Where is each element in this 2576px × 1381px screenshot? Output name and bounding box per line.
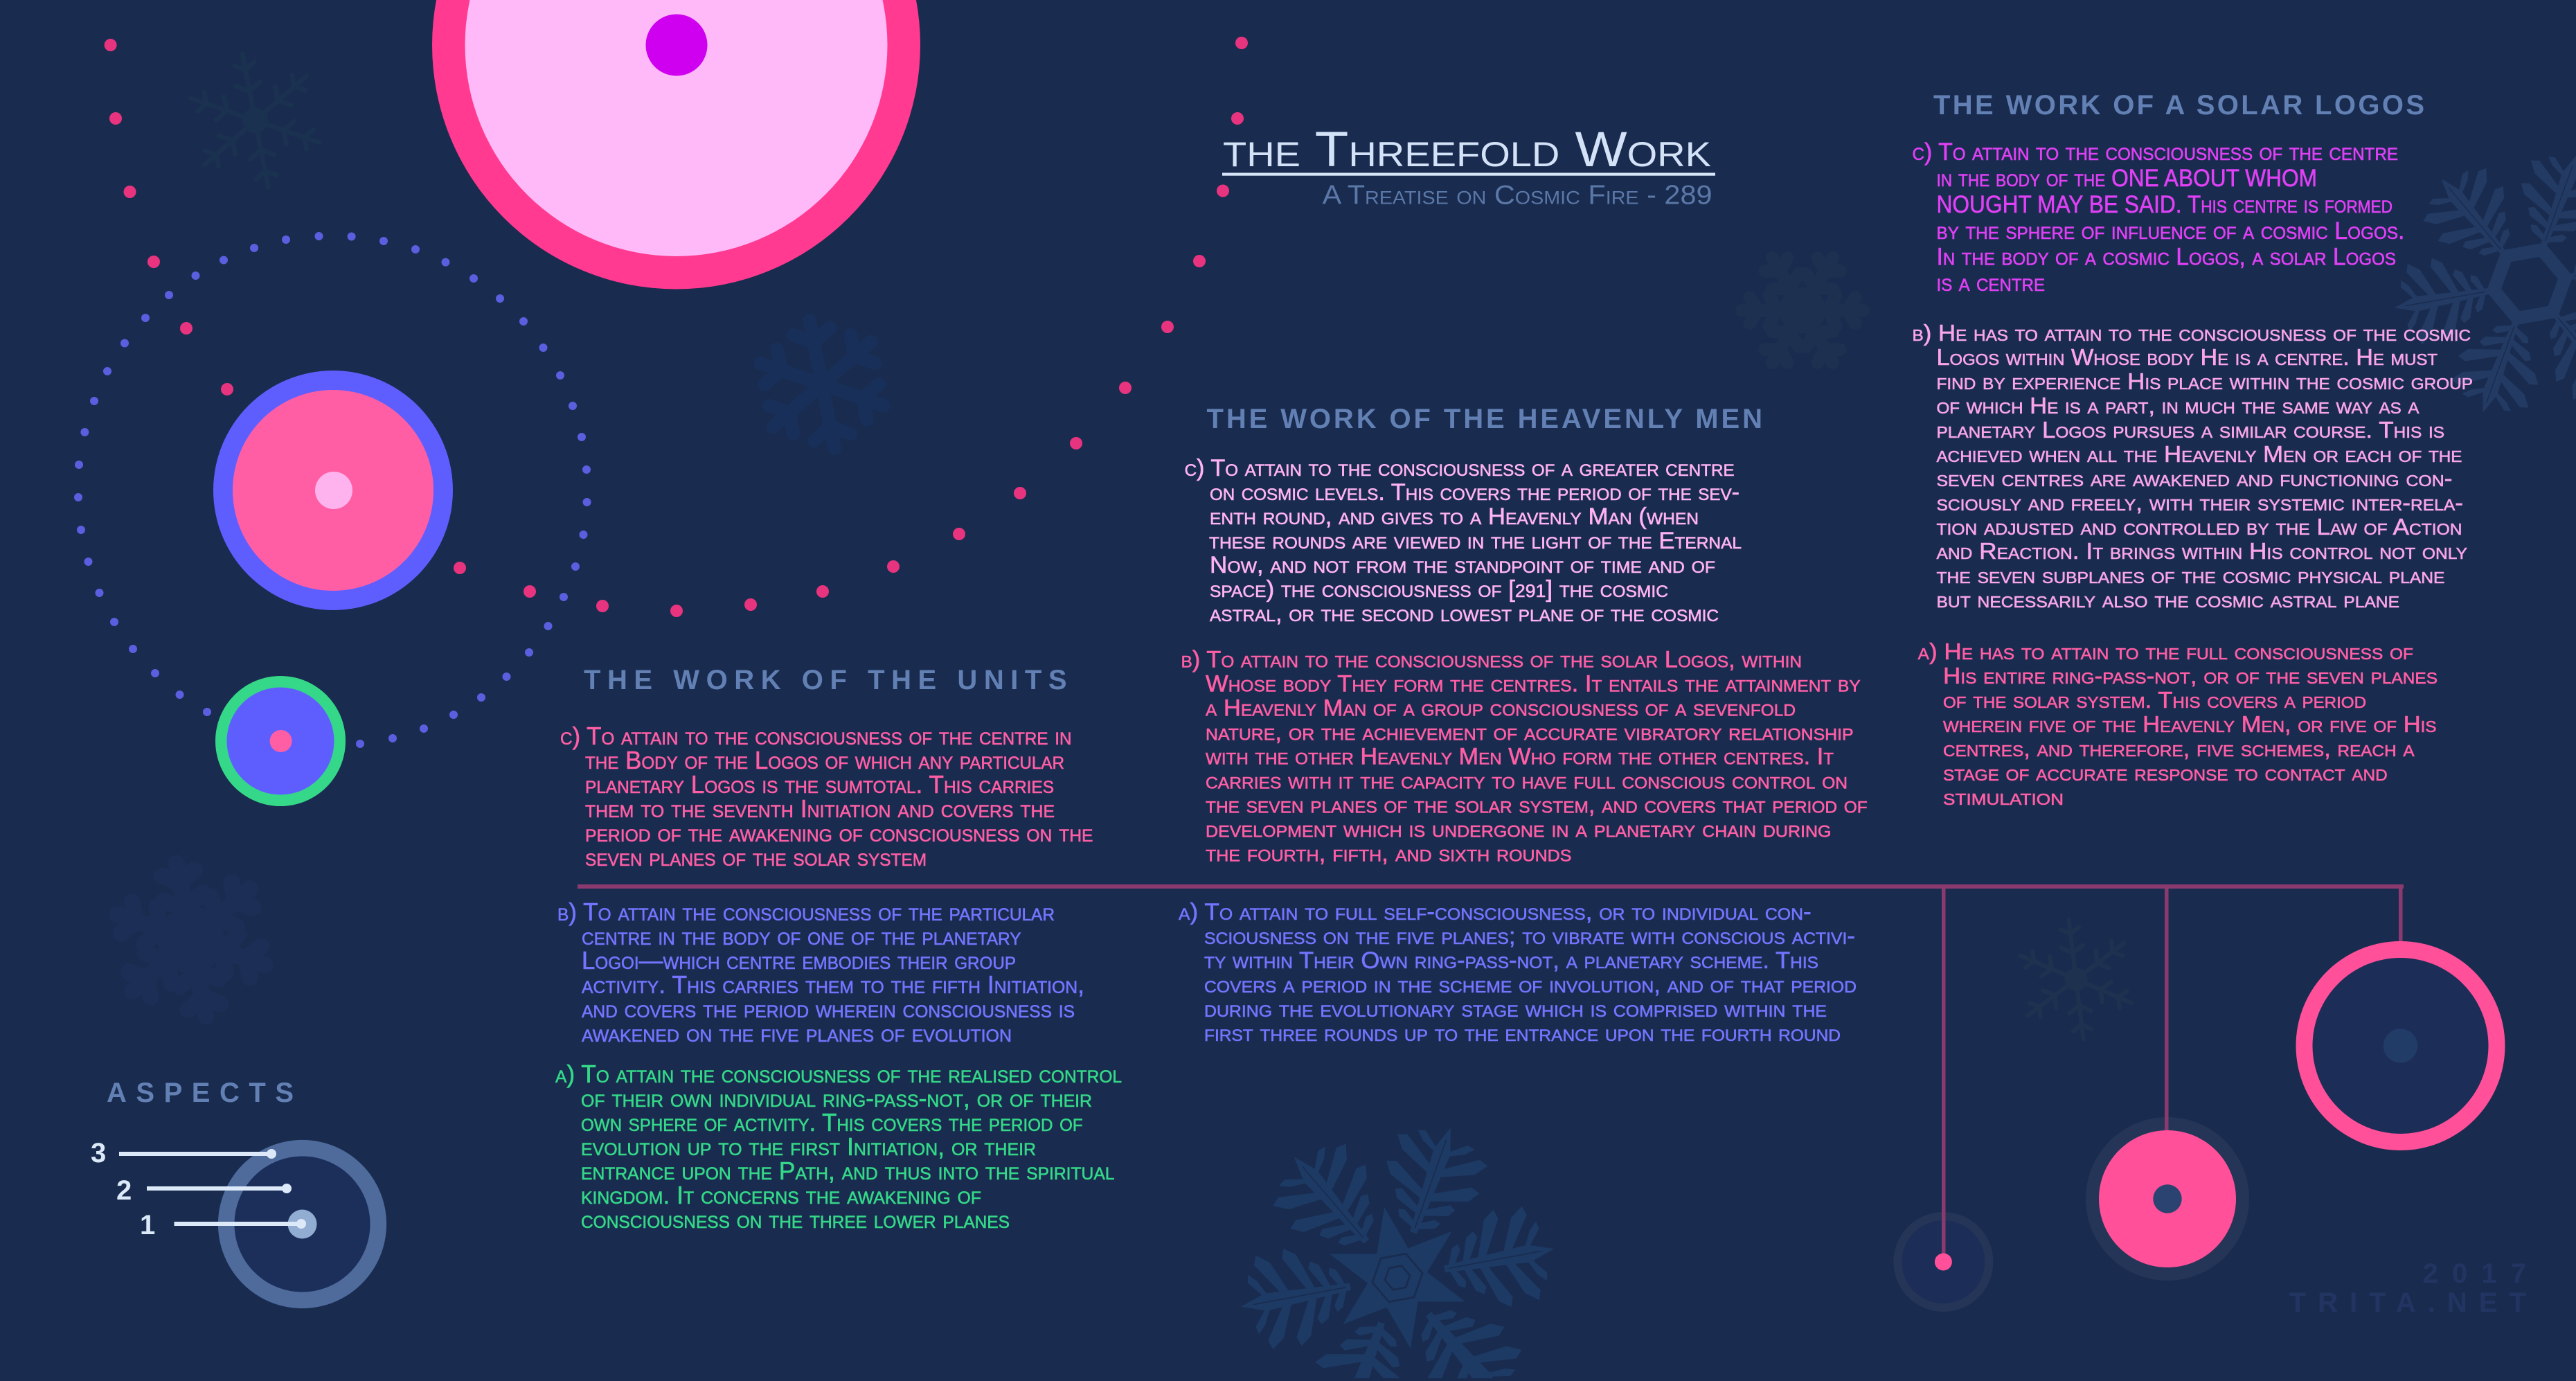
text block: solar logos b: sciously and freely, with their systemic inter-rela- bbox=[1936, 490, 2463, 515]
text block: units a: own sphere of activity. This covers the period of bbox=[581, 1108, 1083, 1137]
snowflake: lower left bbox=[100, 848, 283, 1031]
text block: units a: kingdom. It concerns the awakening of bbox=[581, 1181, 981, 1209]
text block: heavenly men b: the seven planes of the solar system, and covers that period of bbox=[1206, 792, 1868, 819]
aspects diagram: 1 bbox=[140, 1210, 155, 1240]
text block: solar logos a: of the solar system. This covers a period bbox=[1943, 687, 2366, 713]
text block: heavenly men b: nature, or the achievement of accurate vibratory relationship bbox=[1206, 719, 1854, 745]
text block: units b: b) To attain the consciousness of the particular bbox=[557, 898, 1055, 926]
text block: units c: the Body of the Logos of which any particular bbox=[585, 746, 1064, 774]
title: the Threefold Work bbox=[1223, 123, 1711, 177]
text block: heavenly men c: these rounds are viewed in the light of the Eternal bbox=[1209, 528, 1742, 554]
text block: heavenly men c: enth round, and gives to a Heavenly Man (when bbox=[1210, 504, 1699, 530]
text block: heavenly men a: a) To attain to full self-consciousness, or to individual con- bbox=[1179, 899, 1812, 925]
text block: heavenly men a: during the evolutionary stage which is comprised within the bbox=[1204, 996, 1827, 1022]
subtitle: A Treatise on Cosmic Fire - 289 bbox=[1323, 180, 1712, 210]
text block: heavenly men a bbox=[1179, 899, 1857, 1046]
text block: solar logos b: planetary Logos pursues a similar course. This is bbox=[1936, 417, 2444, 443]
text block: units a: entrance upon the Path, and thus into the spiritual bbox=[581, 1157, 1115, 1185]
text block: heavenly men a: covers a period in the scheme of involution, and of that period bbox=[1204, 972, 1857, 998]
snowflake: top right crystal bbox=[2370, 123, 2576, 445]
text block: units c: seven planes of the solar system bbox=[585, 843, 927, 871]
divider with hanging lines bbox=[578, 884, 2404, 1262]
aspects diagram: 2 bbox=[116, 1175, 132, 1206]
text block: heavenly men c: on cosmic levels. This covers the period of the sev- bbox=[1210, 479, 1739, 506]
text block: solar logos b: find by experience His place within the cosmic group bbox=[1936, 368, 2473, 394]
heading: aspects: ASPECTS bbox=[107, 1078, 294, 1108]
credit: TRITA.NET bbox=[2289, 1288, 2526, 1318]
text block: heavenly men b: development which is undergone in a planetary chain during bbox=[1206, 816, 1831, 842]
heading: the work of a solar logos: THE WORK OF A SOLAR LOGOS bbox=[1933, 90, 2424, 121]
credit bbox=[2289, 1258, 2526, 1318]
blue orbit dots bbox=[74, 232, 591, 748]
text block: units a: a) To attain the consciousness of the realised control bbox=[555, 1060, 1122, 1088]
text block: heavenly men a: sciousness on the five planes; to vibrate with conscious activi- bbox=[1204, 923, 1855, 950]
ring: medium filled bbox=[2086, 1117, 2249, 1281]
snowflake: lower right bbox=[2012, 913, 2140, 1046]
text block: units a bbox=[555, 1060, 1122, 1233]
text block: units b: activity. This carries them to the fifth Initiation, bbox=[582, 970, 1084, 999]
text block: heavenly men c: c) To attain to the consciousness of a greater centre bbox=[1185, 455, 1735, 481]
text block: solar logos c: by the sphere of influence of a cosmic Logos. bbox=[1936, 217, 2404, 244]
text block: solar logos b: achieved when all the Heavenly Men or each of the bbox=[1936, 441, 2462, 467]
text block: solar logos a bbox=[1918, 639, 2438, 810]
text block: solar logos b: the seven subplanes of the cosmic physical plane bbox=[1936, 562, 2444, 588]
text block: heavenly men c: space) the consciousness of [ 291] the cosmic bbox=[1210, 576, 1668, 603]
snowflake: top left bbox=[179, 42, 332, 199]
text block: heavenly men c: astral, or the second lowest plane of the cosmic bbox=[1210, 600, 1719, 627]
aspects diagram bbox=[91, 1138, 386, 1308]
credit: 2017 bbox=[2423, 1258, 2526, 1289]
text block: solar logos a: wherein five of the Heavenly Men, or five of His bbox=[1943, 711, 2436, 737]
planet: green ring with blue disc bbox=[215, 676, 346, 806]
text block: units a: evolution up to the first Initiation, or their bbox=[581, 1132, 1036, 1161]
text block: units c: planetary Logos is the sumtotal. This carries bbox=[585, 770, 1054, 799]
snowflake: centre top bbox=[1742, 250, 1863, 371]
text block: units b: and covers the period wherein consciousness is bbox=[582, 995, 1075, 1023]
text block: solar logos c: NOUGHT MAY BE SAID. This centre is formed bbox=[1936, 191, 2392, 218]
text block: solar logos b: seven centres are awakened and functioning con- bbox=[1936, 465, 2453, 491]
text block: heavenly men a: ty within Their Own ring-pass-not, a planetary scheme. This bbox=[1204, 947, 1818, 974]
text block: solar logos a: stimulation bbox=[1943, 784, 2064, 810]
planet: blue ring with pink disc bbox=[213, 371, 453, 610]
heading: the work of the heavenly men: THE WORK OF THE HEAVENLY MEN bbox=[1206, 404, 1762, 434]
text block: heavenly men b bbox=[1181, 647, 1868, 867]
text block: units b: Logoi—which centre embodies their group bbox=[582, 946, 1016, 974]
text block: units c: them to the seventh Initiation and covers the bbox=[585, 794, 1055, 823]
text block: solar logos a: centres, and therefore, five schemes, reach a bbox=[1943, 736, 2415, 761]
text block: solar logos c bbox=[1913, 139, 2404, 296]
text block: solar logos a: His entire ring-pass-not, or of the seven planes bbox=[1943, 663, 2438, 688]
text block: solar logos c: c) To attain to the consciousness of the centre bbox=[1913, 139, 2398, 166]
text block: heavenly men a: first three rounds up to the entrance upon the fourth round bbox=[1204, 1020, 1841, 1046]
text block: solar logos b: tion adjusted and controlled by the Law of Action bbox=[1936, 514, 2462, 540]
text block: units a: of their own individual ring-pass-not, or of their bbox=[581, 1084, 1092, 1112]
text block: solar logos a: stage of accurate response to contact and bbox=[1943, 760, 2388, 785]
text block: solar logos b: and Reaction. It brings within His control not only bbox=[1936, 538, 2467, 564]
text block: solar logos c: In the body of a cosmic Logos, a solar Logos bbox=[1936, 244, 2396, 270]
text block: solar logos c: in the body of the ONE ABOUT WHOM bbox=[1936, 165, 2317, 192]
snowflake: centre left bbox=[745, 308, 899, 461]
text block: heavenly men b: carries with it the capacity to have full conscious control on bbox=[1206, 767, 1848, 794]
ring: large hollow bbox=[2296, 941, 2505, 1150]
text block: units c: period of the awakening of consciousness on the bbox=[585, 819, 1093, 847]
text block: heavenly men b: b) To attain to the consciousness of the solar Logos, within bbox=[1181, 647, 1802, 673]
text block: heavenly men b: the fourth, fifth, and sixth rounds bbox=[1206, 841, 1571, 867]
text block: heavenly men c bbox=[1185, 455, 1742, 627]
text block: solar logos b: b) He has to attain to the consciousness of the cosmic bbox=[1913, 320, 2471, 346]
text block: solar logos a: a) He has to attain to the full consciousness of bbox=[1918, 639, 2413, 664]
ring: small centre bbox=[1893, 1212, 1993, 1312]
aspects diagram: 3 bbox=[91, 1138, 106, 1168]
text block: solar logos c: is a centre bbox=[1936, 269, 2045, 296]
text block: solar logos b bbox=[1913, 320, 2473, 612]
text block: solar logos b: but necessarily also the cosmic astral plane bbox=[1936, 587, 2399, 612]
text block: heavenly men b: a Heavenly Man of a group consciousness of a sevenfold bbox=[1206, 695, 1796, 722]
heading: the work of the units: THE WORK OF THE UNITS bbox=[584, 665, 1067, 695]
text block: units c: c) To attain to the consciousness of the centre in bbox=[560, 722, 1072, 750]
sun: large pink circle bbox=[432, 0, 920, 289]
text block: units a: consciousness on the three lower planes bbox=[581, 1205, 1010, 1233]
text block: heavenly men b: with the other Heavenly Men Who form the other centres. It bbox=[1206, 744, 1834, 770]
text block: heavenly men b: Whose body They form the centres. It entails the attainment by bbox=[1206, 670, 1861, 697]
text block: solar logos b: of which He is a part, in much the same way as a bbox=[1936, 393, 2420, 418]
text block: units b: centre in the body of one of the planetary bbox=[582, 922, 1021, 950]
text block: units c bbox=[560, 722, 1093, 871]
text block: units b bbox=[557, 898, 1084, 1047]
text block: units b: awakened on the five planes of evolution bbox=[582, 1019, 1012, 1047]
text block: solar logos b: Logos within Whose body He is a centre. He must bbox=[1936, 344, 2438, 370]
pink orbit dots bbox=[105, 37, 1248, 617]
snowflake: bottom centre crystal bbox=[1211, 1089, 1582, 1381]
text block: heavenly men c: Now, and not from the standpoint of time and of bbox=[1210, 552, 1715, 578]
